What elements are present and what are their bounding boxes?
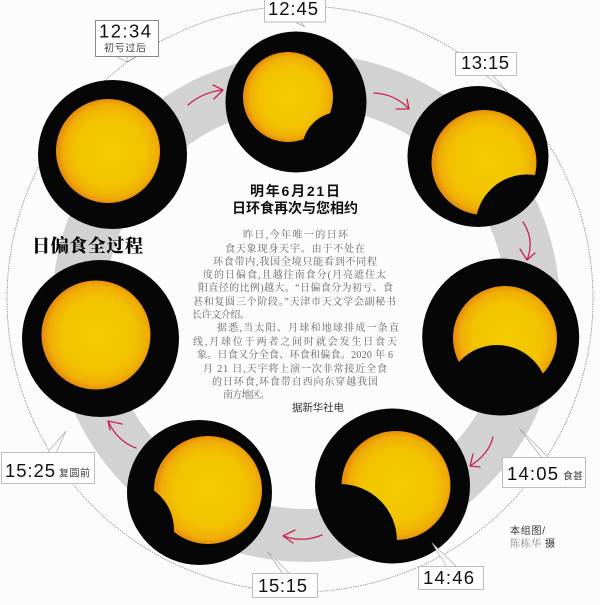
article body text: 象。日食又分全食、环食和偏食。2020 年 6	[197, 348, 393, 361]
label: 13:15	[456, 52, 516, 92]
article body text: 长许文介绍。	[192, 308, 250, 321]
article body text: 线,月球位于两者之间时就会发生日食天	[193, 335, 397, 348]
label: 12:34: 初亏过后	[104, 42, 146, 54]
photo credit: 陈栋华	[510, 537, 541, 550]
arrow: 15:15 to 15:25	[108, 421, 136, 448]
arrow: 14:05 to 14:46	[470, 437, 493, 467]
label: 14:46	[418, 543, 484, 590]
article body text: 环食带内,我国全境只能看到不同程	[213, 255, 377, 268]
label: 13:15: 13:15	[461, 52, 509, 73]
source credit: 据新华社电: 据新华社电	[292, 401, 344, 414]
eclipse photo: 12:34	[38, 80, 187, 229]
article body text: 食天象现身天宇。由于不处在	[225, 242, 365, 255]
article body text: 据悉,当太阳、月球和地球排成一条直	[217, 321, 399, 334]
article body text: 的日环食,环食带自西向东穿越我国	[212, 375, 378, 388]
label: 14:46: 14:46	[423, 567, 474, 588]
title: 日偏食全过程: 日偏食全过程	[32, 235, 143, 256]
label: 15:25 复圆前: 复圆前	[59, 466, 90, 480]
article body text: 南方地区。	[223, 388, 270, 401]
arrow: 14:46 to 15:15	[283, 530, 322, 543]
article body text: 甚和复圆三个阶段。”天津市天文学会副秘书	[193, 295, 396, 308]
article body text: 阳直径的比例)越大。“日偏食分为初亏、食	[198, 281, 393, 294]
label: 15:25 复圆前: 15:25	[5, 460, 55, 481]
arrow: 13:15 to 14:05	[520, 222, 535, 260]
label: 15:25 复圆前	[2, 431, 94, 484]
label: 12:34	[96, 20, 158, 62]
photo credit	[510, 524, 555, 550]
grey orbit band	[78, 80, 534, 536]
arrow: 12:45 to 13:15	[374, 93, 409, 109]
article body text	[192, 228, 399, 401]
label: 14:05 食甚: 14:05	[507, 463, 558, 484]
label: 12:34: 12:34	[99, 20, 151, 42]
eclipse photo: 15:15	[127, 420, 272, 565]
label: 12:45	[264, 0, 326, 27]
article body text: 月 21 日,天宇将上演一次非常接近全食	[203, 362, 387, 375]
photo credit: 摄	[545, 537, 555, 550]
photo credit: 本组图/	[510, 524, 545, 537]
label: 14:05 食甚: 食甚	[563, 470, 583, 482]
eclipse photo: 12:45	[226, 32, 366, 172]
heading: center article: 日环食再次与您相约	[232, 200, 358, 216]
heading: center article	[232, 183, 358, 216]
arrow: 12:34 to 12:45	[188, 85, 223, 105]
label: 14:05 食甚	[502, 428, 586, 488]
heading: center article: 明年6月21日	[250, 183, 340, 199]
article body text: 度的日偏食,且越往南食分(月亮遮住太	[203, 268, 386, 281]
eclipse photo: 14:46	[315, 408, 470, 564]
eclipse photo: 15:25	[22, 260, 179, 417]
article body text: 昨日,今年唯一的日环	[243, 228, 349, 241]
arrows	[108, 85, 535, 543]
eclipse photo: 14:05	[422, 258, 580, 416]
eclipse photo: 13:15	[408, 86, 548, 227]
label: 15:15	[252, 551, 318, 598]
label: 15:15: 15:15	[258, 575, 307, 596]
